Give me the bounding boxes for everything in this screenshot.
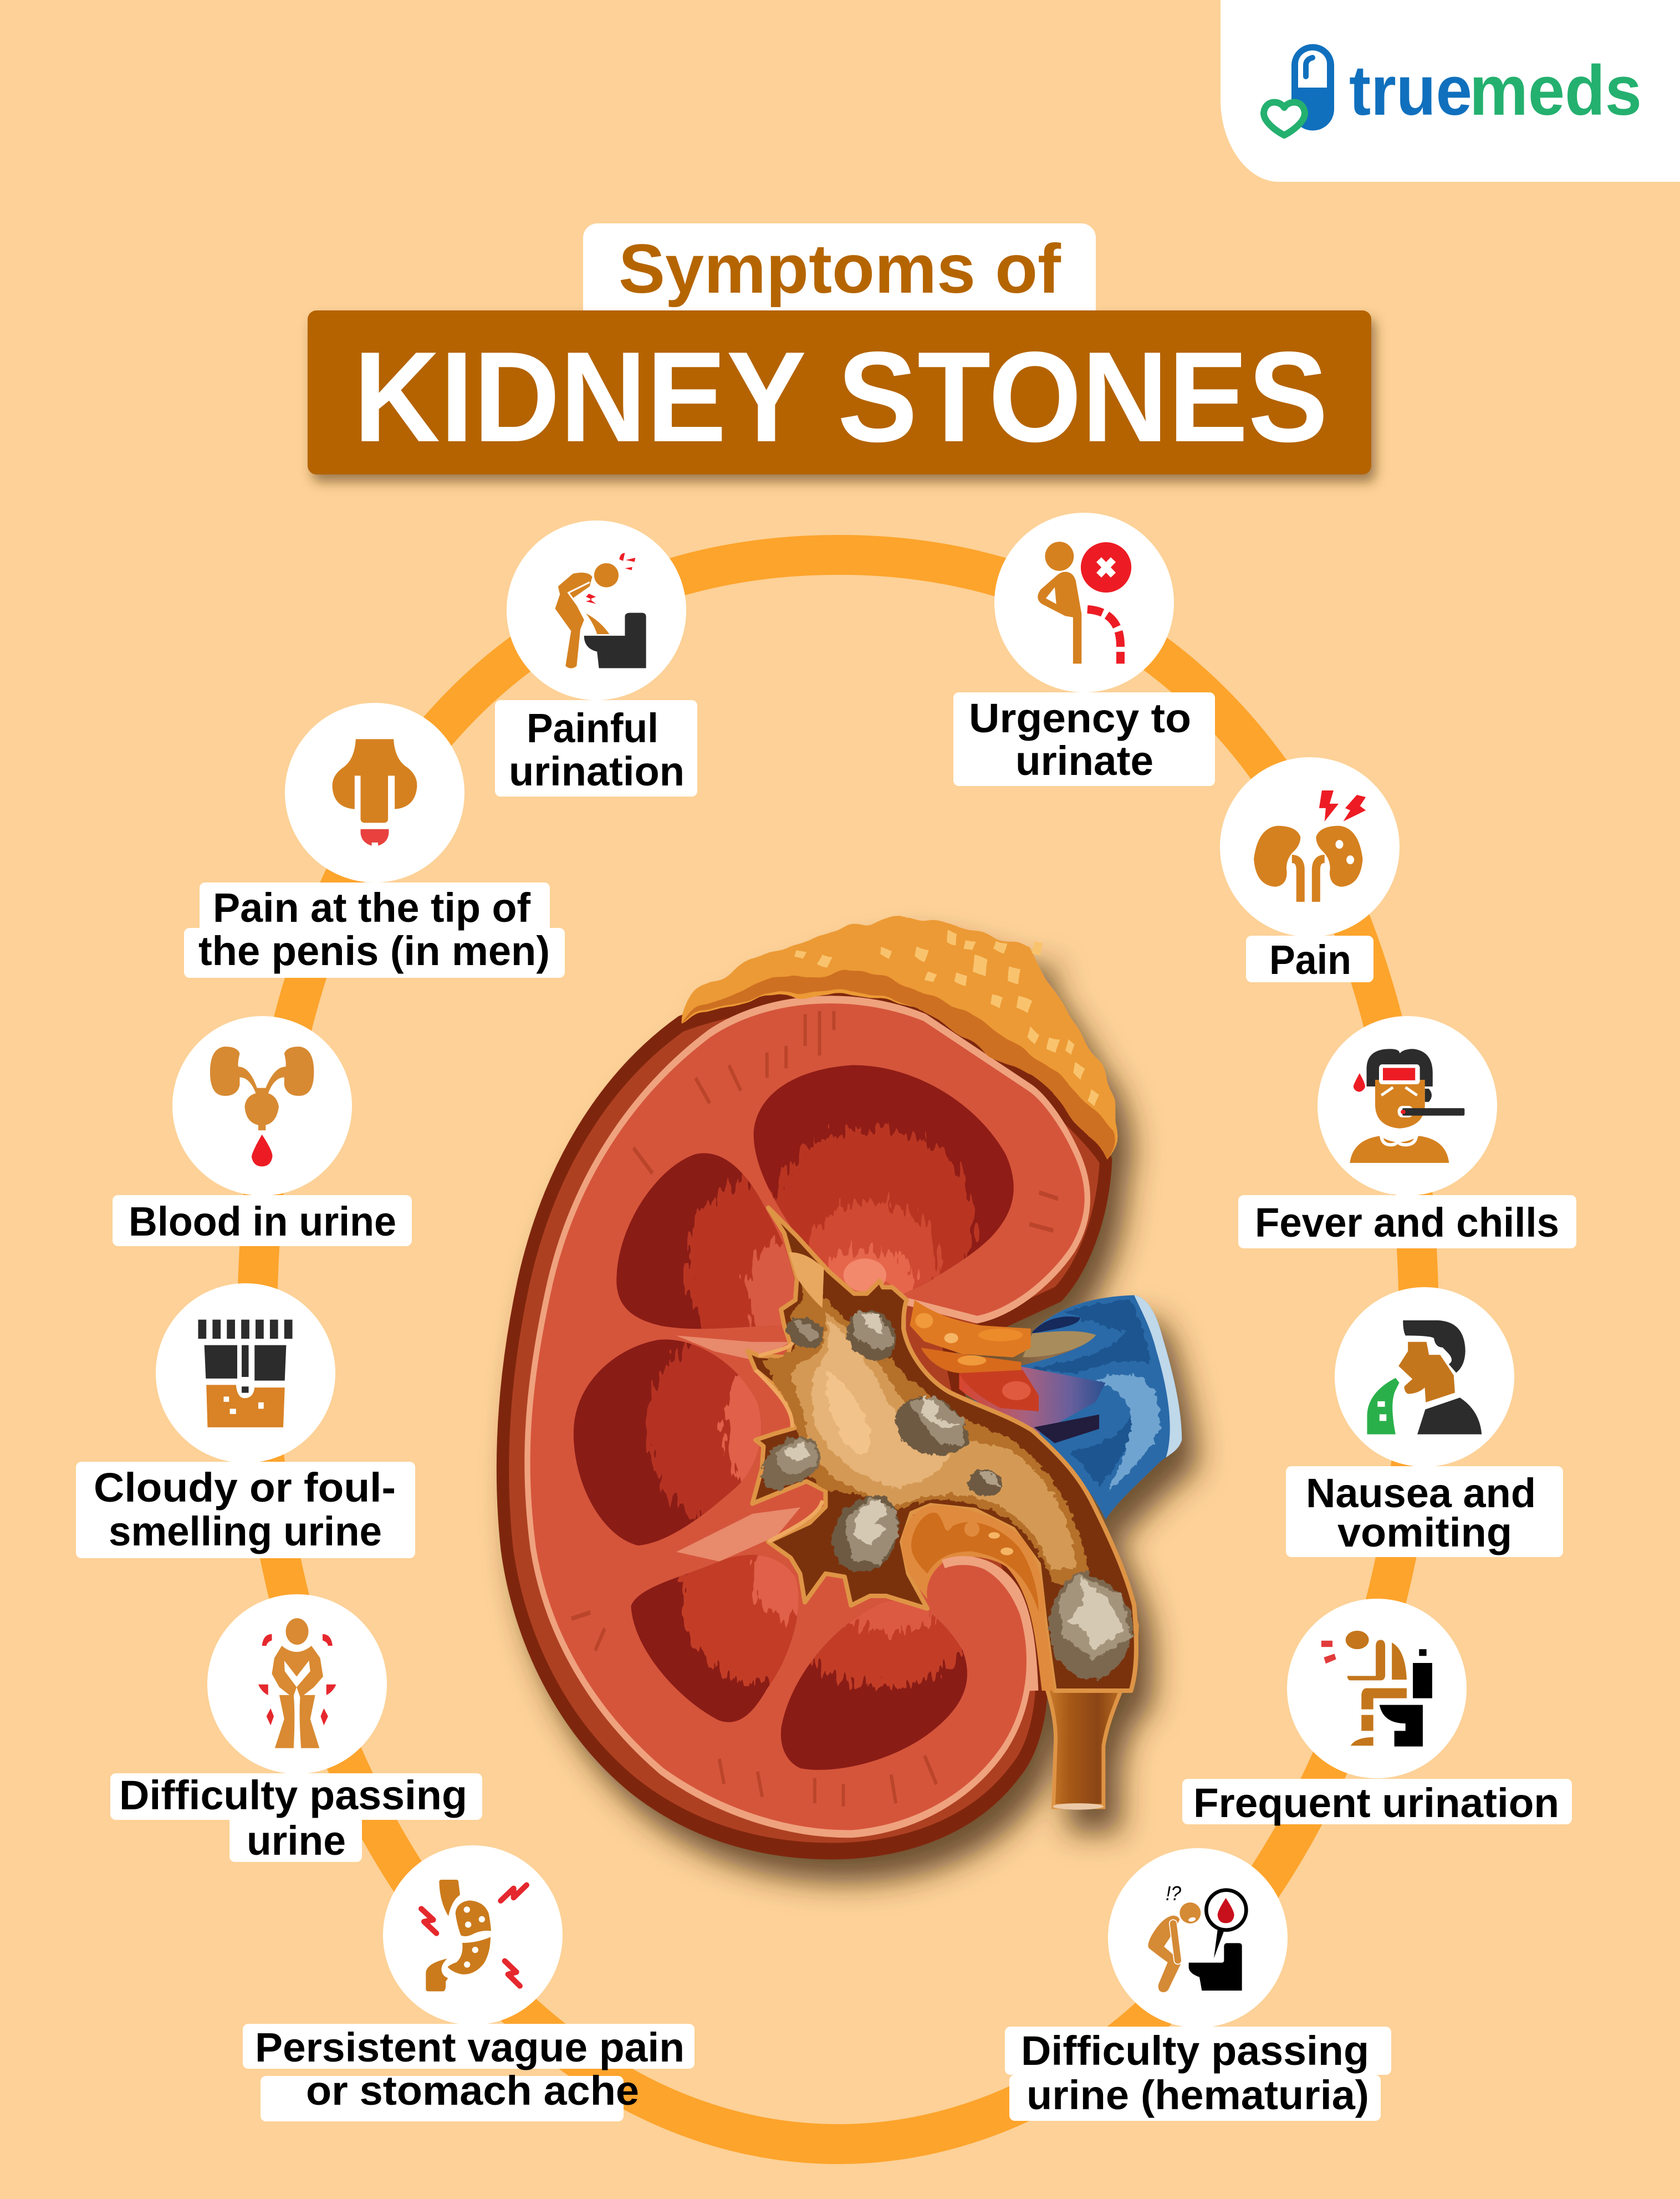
icon text: question marks: !? bbox=[1166, 1882, 1181, 1905]
subtitle: Symptoms of: Symptoms of bbox=[619, 231, 1061, 308]
symptom: Urgency to urinate bbox=[953, 513, 1215, 786]
icon: urgency bbox=[1038, 542, 1131, 664]
icon: heart bbox=[1264, 103, 1305, 135]
logo panel bbox=[1221, 0, 1680, 182]
symptom: Cloudy or foul-smelling urine bbox=[76, 1283, 415, 1558]
icon: vomiting person bbox=[1367, 1320, 1482, 1434]
label: Pain bbox=[1246, 936, 1373, 983]
pyramid upper left bbox=[616, 1153, 795, 1329]
label: Difficulty passing urine bbox=[110, 1772, 482, 1864]
heading: Kidney Stones: KIDNEY STONES bbox=[354, 325, 1328, 469]
pelvis fold bbox=[902, 1505, 1055, 1691]
icon: painful urination bbox=[555, 553, 646, 669]
pyramid lower left bbox=[631, 1555, 799, 1722]
label: Nausea and vomiting: Nausea and bbox=[1306, 1470, 1536, 1516]
label: Painful urination: urination bbox=[509, 748, 685, 794]
label: Cloudy or foul-smelling urine: smelling urine bbox=[109, 1508, 382, 1554]
label: Cloudy or foul-smelling urine bbox=[76, 1462, 415, 1558]
symptom: Difficulty passing urine (hematuria) bbox=[1005, 1848, 1391, 2121]
icon circle bbox=[172, 1016, 352, 1196]
icon circle bbox=[1108, 1848, 1288, 2028]
subtitle: Symptoms of bbox=[583, 223, 1096, 323]
kidney cortex bbox=[527, 999, 1087, 1834]
label: Difficulty passing urine (hematuria): Difficulty passing bbox=[1021, 2028, 1369, 2074]
icon circle bbox=[1220, 757, 1400, 937]
label: Persistent vague pain or stomach ache: or stomach ache bbox=[306, 2068, 639, 2114]
symptom: Pain bbox=[1220, 757, 1400, 983]
icon: holding abdomen bbox=[258, 1618, 336, 1748]
icon: kidneys with bolts bbox=[1254, 790, 1366, 902]
label: Frequent urination: Frequent urination bbox=[1193, 1780, 1559, 1826]
renal vein bbox=[959, 1295, 1182, 1519]
symptom: Difficulty passing urine bbox=[110, 1594, 482, 1864]
symptom: Blood in urine bbox=[113, 1016, 412, 1246]
pyramid lower right bbox=[780, 1601, 967, 1770]
ureter bbox=[1039, 1555, 1137, 1807]
label: Difficulty passing urine (hematuria) bbox=[1005, 2027, 1391, 2121]
logo wordmark bbox=[1349, 51, 1642, 130]
label: Painful urination bbox=[495, 700, 697, 797]
icon circle bbox=[507, 521, 686, 700]
orange ring connecting the symptoms bbox=[257, 555, 1419, 2144]
symptom: Nausea and vomiting bbox=[1286, 1287, 1563, 1557]
label: Urgency to urinate bbox=[953, 692, 1215, 786]
symptom: Painful urination bbox=[495, 521, 697, 797]
icon: urine cup bbox=[198, 1320, 293, 1427]
renal sinus bbox=[748, 1208, 1136, 1691]
label: Difficulty passing urine: Difficulty passing bbox=[119, 1772, 467, 1818]
label: Pain at the tip of the penis (in men): Pain at the tip of bbox=[213, 885, 530, 931]
label: Persistent vague pain or stomach ache: Persistent vague pain bbox=[255, 2024, 685, 2070]
label: Urgency to urinate: Urgency to bbox=[969, 695, 1191, 741]
label: Difficulty passing urine (hematuria): urine (hematuria) bbox=[1027, 2072, 1369, 2118]
logo wordmark: true bbox=[1349, 51, 1472, 130]
icon: urinary tract with blood drop bbox=[210, 1047, 314, 1166]
symptom: Fever and chills bbox=[1238, 1016, 1576, 1248]
label: Pain: Pain bbox=[1269, 937, 1351, 983]
renal artery bbox=[910, 1300, 1039, 1411]
pyramid left bbox=[573, 1339, 762, 1545]
label: Cloudy or foul-smelling urine: Cloudy or foul- bbox=[94, 1465, 396, 1511]
label: Pain at the tip of the penis (in men) bbox=[184, 882, 565, 978]
icon: fever bbox=[1350, 1049, 1464, 1163]
kidney septa bbox=[676, 1335, 800, 1562]
icon circle bbox=[1335, 1287, 1514, 1467]
label: Pain at the tip of the penis (in men): the penis (in men) bbox=[198, 928, 550, 974]
label: Nausea and vomiting bbox=[1286, 1466, 1563, 1557]
label: Persistent vague pain or stomach ache bbox=[243, 2024, 695, 2121]
icon: penis pain bbox=[333, 739, 417, 846]
icon circle bbox=[156, 1283, 335, 1463]
icon: pill bbox=[1291, 44, 1334, 131]
icon circle bbox=[994, 513, 1174, 692]
icon: person checking blood bbox=[1148, 1890, 1246, 1992]
symptom: Persistent vague pain or stomach ache bbox=[243, 1845, 695, 2121]
kidney body bbox=[503, 1001, 1106, 1851]
label: Blood in urine: Blood in urine bbox=[129, 1198, 396, 1244]
icon circle bbox=[383, 1845, 563, 2025]
label: Fever and chills: Fever and chills bbox=[1255, 1200, 1559, 1246]
label: Urgency to urinate: urinate bbox=[1015, 738, 1153, 784]
kidney illustration bbox=[503, 919, 1182, 1851]
label: Painful urination: Painful bbox=[527, 705, 658, 751]
symptom: Pain at the tip of the penis bbox=[184, 703, 565, 978]
symptom: Frequent urination bbox=[1182, 1599, 1572, 1826]
icon circle bbox=[1318, 1016, 1497, 1196]
icon circle bbox=[1287, 1599, 1467, 1778]
label: Nausea and vomiting: vomiting bbox=[1337, 1509, 1512, 1555]
adrenal gland bbox=[681, 919, 1117, 1159]
icon circle bbox=[207, 1594, 387, 1774]
icon: stomach pain bbox=[421, 1880, 527, 1991]
title bbox=[308, 223, 1371, 475]
label: Difficulty passing urine: urine bbox=[247, 1818, 346, 1864]
logo wordmark: meds bbox=[1469, 51, 1642, 130]
pyramid top bbox=[754, 1065, 1014, 1294]
icon circle bbox=[285, 703, 464, 882]
kidney stones bbox=[762, 1310, 1133, 1679]
icon: person on toilet bbox=[1321, 1631, 1432, 1747]
